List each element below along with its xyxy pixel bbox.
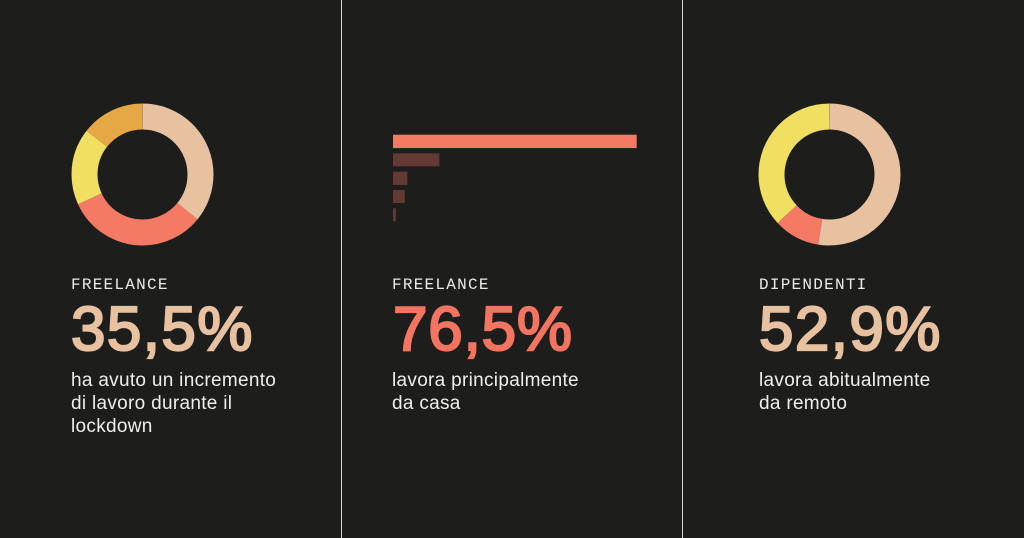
headline number: 76,5%: [393, 295, 573, 364]
donut chart: remote work: [758, 104, 900, 246]
description: lavora principalmente: [392, 370, 579, 391]
description: [759, 370, 931, 414]
category label: FREELANCE: [71, 276, 169, 294]
description: da casa: [392, 393, 461, 414]
panel: employees remote work: [758, 104, 942, 414]
description: lavora abitualmente: [759, 370, 931, 391]
description: [392, 370, 579, 414]
headline number: 35,5%: [71, 295, 254, 364]
divider left: [341, 0, 342, 538]
panel: freelance workload: [71, 104, 276, 437]
description: da remoto: [759, 393, 847, 414]
description: ha avuto un incremento: [71, 370, 276, 391]
donut chart: workload change: [72, 104, 214, 246]
category label: DIPENDENTI: [759, 276, 868, 294]
bar chart: workplace: [393, 134, 637, 222]
divider right: [682, 0, 683, 538]
description: di lavoro durante il: [71, 393, 232, 414]
headline number: 52,9%: [759, 295, 942, 364]
description: lockdown: [71, 416, 153, 437]
category label: FREELANCE: [392, 276, 490, 294]
description: [71, 370, 276, 437]
panel: freelance workplace: [392, 134, 637, 414]
